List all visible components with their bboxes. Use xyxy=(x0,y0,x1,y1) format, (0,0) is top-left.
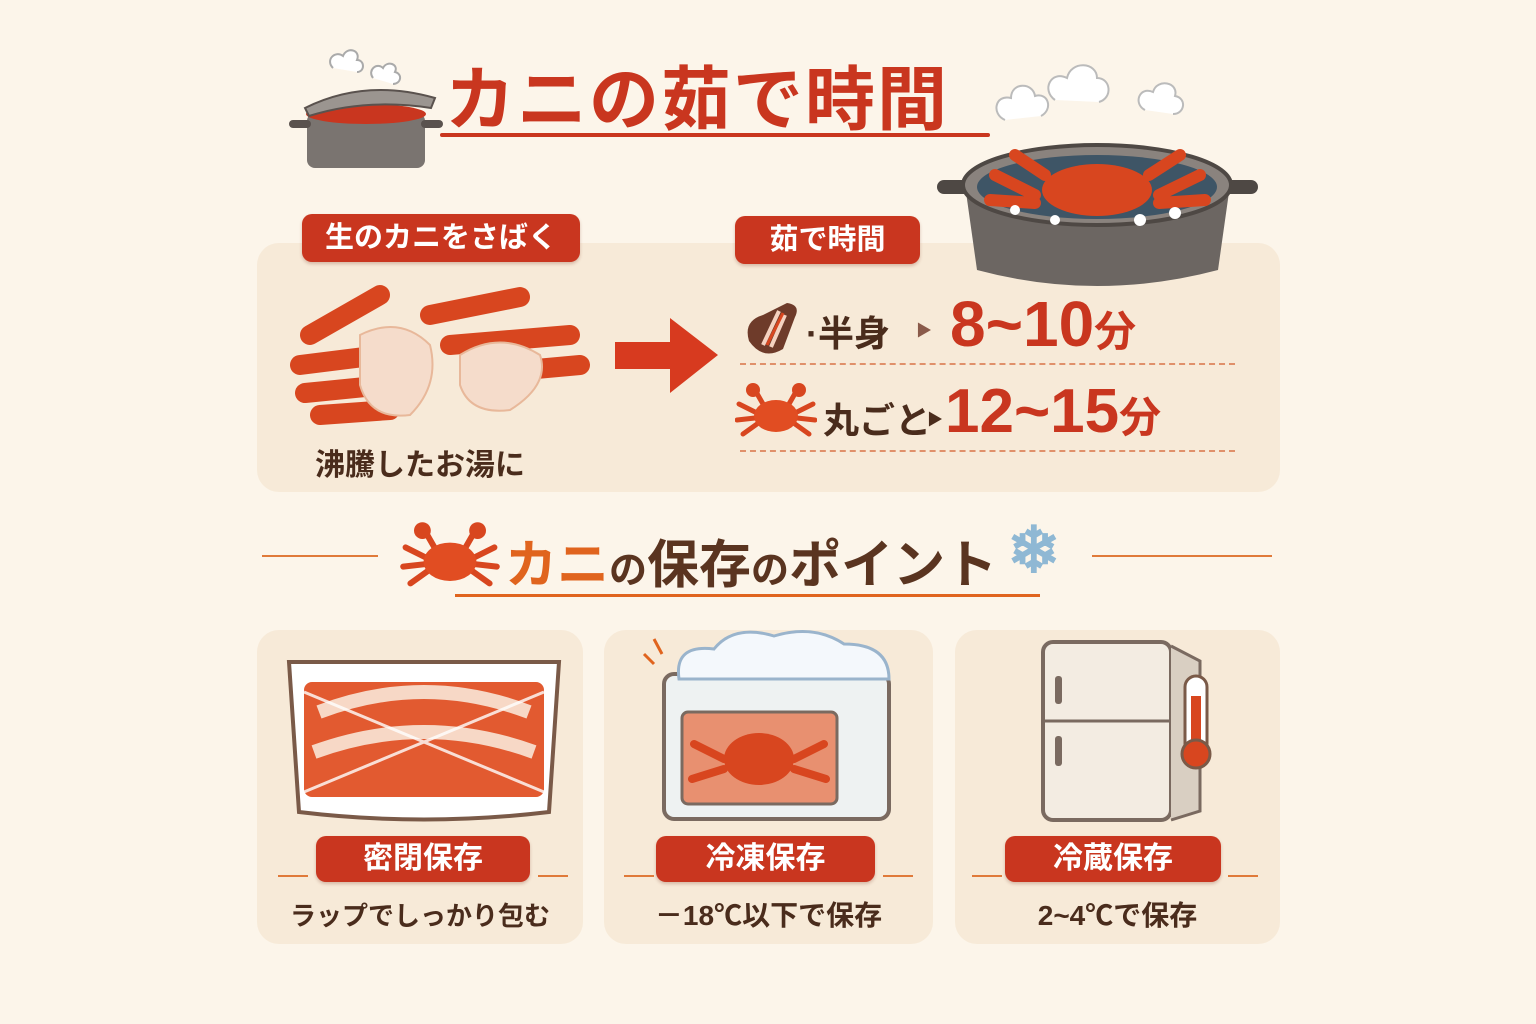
icon: big pot with crab xyxy=(937,64,1258,286)
icon: crab xyxy=(735,383,817,436)
text: half: ·半身 xyxy=(806,313,890,354)
label: raw crab xyxy=(302,214,580,262)
label: boil time: 茹で時間 xyxy=(769,224,886,256)
illustration: freezer xyxy=(643,630,891,821)
label: 密閉保存 xyxy=(363,842,483,875)
illustration: fridge xyxy=(1041,640,1212,822)
label xyxy=(316,836,530,882)
text: whole: 丸ごと xyxy=(823,400,931,441)
text: 2~4℃で保存 xyxy=(1038,900,1197,931)
arrow xyxy=(615,318,718,393)
title underline xyxy=(440,133,990,137)
row: whole xyxy=(735,377,1161,446)
panel: boiling xyxy=(257,243,1280,492)
text: －18℃以下で保存 xyxy=(655,900,882,931)
card: freeze xyxy=(604,630,933,944)
title: カニの茹で時間 xyxy=(445,61,949,139)
time: 12-15: 12~15分 xyxy=(945,377,1161,446)
label: 冷蔵保存 xyxy=(1053,842,1173,875)
icon: small pot xyxy=(289,49,443,168)
row: half body xyxy=(748,288,1136,360)
row: half body: ▶ xyxy=(916,323,932,340)
label xyxy=(1005,836,1221,882)
icon: crab xyxy=(400,522,500,586)
heading text: カニの保存のポイント xyxy=(505,537,997,595)
label xyxy=(656,836,875,882)
illustration: cut crab legs xyxy=(290,285,590,425)
text: ラップでしっかり包む xyxy=(290,901,550,931)
text: in boiling water: 沸騰したお湯に xyxy=(315,449,525,482)
time: 8-10: 8~10分 xyxy=(950,288,1136,360)
icon: snowflake: ❄ xyxy=(1007,514,1061,586)
pill side lines xyxy=(278,875,308,877)
label: 冷凍保存 xyxy=(706,842,826,875)
label: boil time xyxy=(735,216,920,264)
section heading: storage xyxy=(262,514,1272,597)
label: raw crab: 生のカニをさばく xyxy=(325,222,557,254)
row: whole: ▶ xyxy=(927,412,943,429)
illustration: tray xyxy=(286,660,562,822)
icon: crab leg xyxy=(748,303,797,354)
card: refrigerate xyxy=(955,630,1280,944)
card: sealed xyxy=(257,630,583,944)
